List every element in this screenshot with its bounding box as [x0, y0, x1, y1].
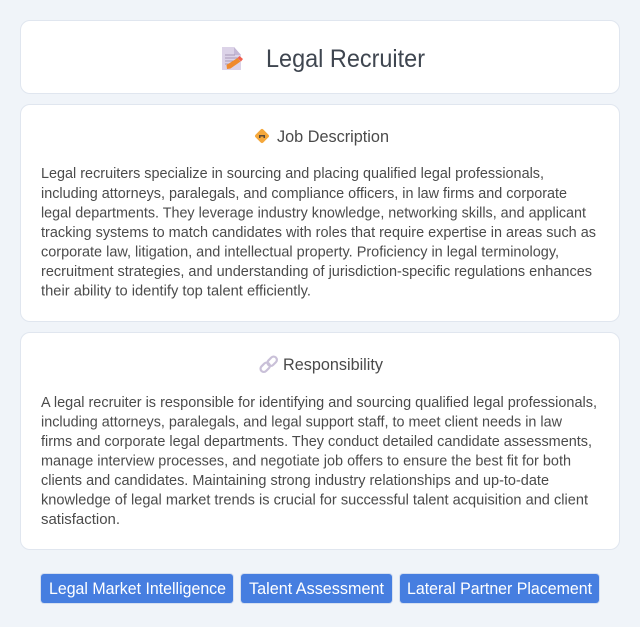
text block: job description: legal departments. They leverage industry knowledge, networking skills, and applicant	[41, 206, 586, 222]
title: Legal Recruiter	[266, 45, 425, 73]
heading: job description: Job Description	[277, 128, 389, 146]
tag label: Lateral Partner Placement: Lateral Partner Placement	[407, 580, 592, 598]
text block: responsibility: firms and corporate legal departments. They conduct detailed candidate assessments,	[41, 434, 592, 450]
tag label: Legal Market Intelligence: Legal Market Intelligence	[49, 580, 226, 598]
text block: responsibility: satisfaction.	[41, 512, 120, 528]
icon: document with pencil	[222, 47, 243, 70]
text block: job description: corporate law, litigation, and intellectual property. Proficiency in legal terminology,	[41, 244, 559, 260]
text block: job description: their ability to identify top talent efficiently.	[41, 284, 311, 300]
tag background: Lateral Partner Placement	[400, 574, 599, 603]
icon: chain link	[259, 355, 278, 373]
text block: job description: Legal recruiters specialize in sourcing and placing qualified legal professionals,	[41, 166, 544, 182]
tag background: Legal Market Intelligence	[41, 574, 233, 603]
text block: job description	[41, 166, 596, 300]
panel: job description card	[20, 104, 620, 322]
text block: responsibility	[41, 395, 597, 528]
text block: responsibility: A legal recruiter is responsible for identifying and sourcing qualified legal professionals,	[41, 395, 597, 411]
heading: responsibility: Responsibility	[283, 356, 384, 374]
panel: responsibility card	[20, 332, 620, 550]
text block: job description: tracking systems to match candidates with roles that require expertise in areas such as	[41, 225, 596, 241]
icon: diamond road sign	[254, 128, 270, 144]
tag background: Talent Assessment	[241, 574, 392, 603]
text block: responsibility: knowledge of legal market trends is crucial for successful talent acquisition and client	[41, 492, 588, 508]
text block: responsibility: manage interview processes, and negotiate job offers to ensure the best fit for both	[41, 454, 571, 470]
text block: responsibility: clients and candidates. Maintaining strong industry relationships and up-to-date	[41, 473, 549, 489]
tag label: Talent Assessment: Talent Assessment	[249, 580, 384, 598]
text block: job description: recruitment strategies, and understanding of jurisdiction-specific regulations enhances	[41, 264, 592, 280]
text block: job description: including attorneys, paralegals, and compliance officers, in law firms and corporate	[41, 186, 567, 202]
panel: title card	[20, 20, 620, 94]
text block: responsibility: including attorneys, paralegals, and legal support staff, to meet client needs in law	[41, 414, 562, 430]
